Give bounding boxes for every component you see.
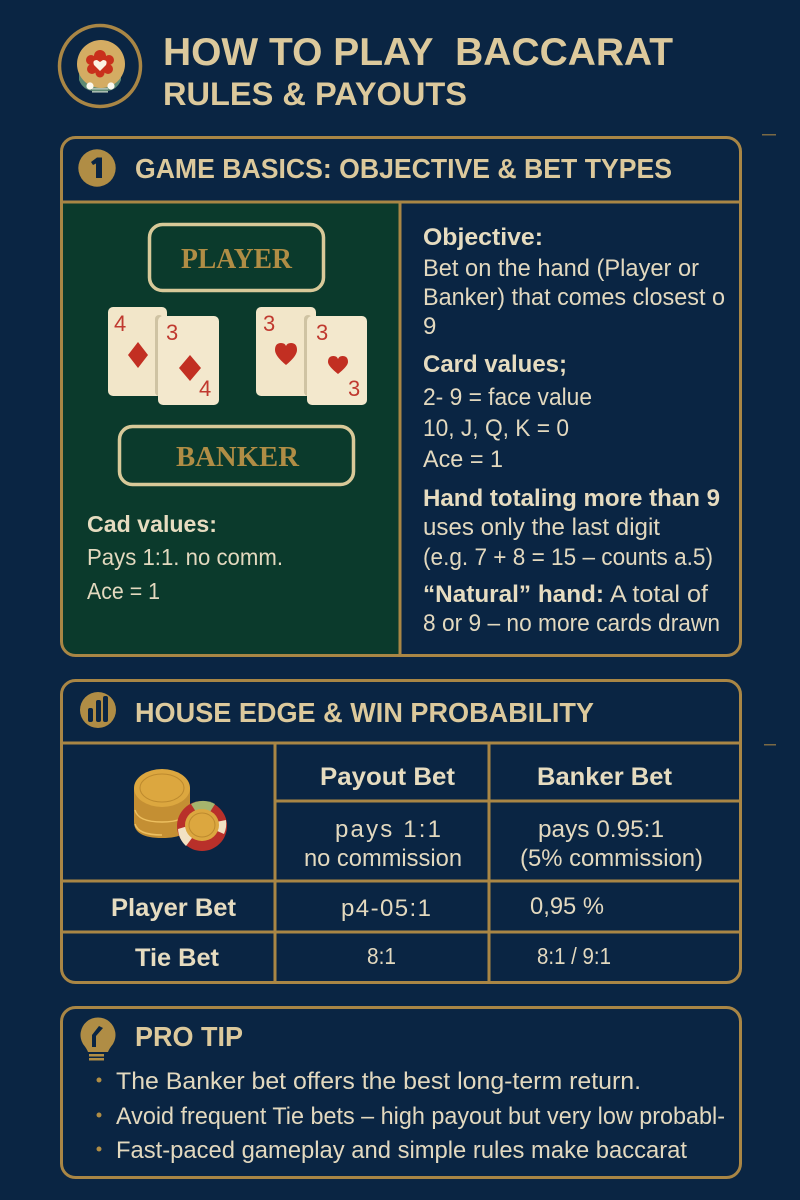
text: hand totals: uses only the last digit bbox=[423, 514, 660, 541]
icon: coins and chip bbox=[134, 769, 227, 851]
playing cards: hearts: 3 bbox=[348, 376, 360, 401]
tip list: Avoid frequent Tie bets – high payout but very low probabl- bbox=[116, 1103, 725, 1130]
text: card values: 10, J, Q, K = 0 bbox=[423, 415, 569, 442]
player label box: PLAYER bbox=[181, 244, 293, 275]
text: natural hand: 8 or 9 – no more cards drawn bbox=[423, 610, 720, 637]
playing cards: diamonds: 4 bbox=[199, 376, 211, 401]
banker label box bbox=[120, 426, 354, 484]
text: natural hand: “Natural” hand: bbox=[423, 581, 604, 608]
text: left card values: Pays 1:1. no comm. bbox=[87, 544, 283, 570]
title: RULES & PAYOUTS bbox=[163, 76, 467, 112]
text: objective: Bet on the hand (Player or bbox=[423, 255, 699, 282]
text: card values: Card values; bbox=[423, 351, 567, 378]
text: objective bbox=[423, 224, 725, 340]
playing cards: diamonds: 4 bbox=[114, 311, 126, 336]
text: left card values: Cad values: bbox=[87, 511, 217, 537]
cell: banker terms bbox=[520, 816, 703, 872]
cell: payout terms: pays 1:1 bbox=[335, 816, 441, 843]
panel: house edge bbox=[61, 680, 741, 983]
tip list: Fast-paced gameplay and simple rules make baccarat bbox=[116, 1137, 687, 1164]
cell: banker terms: (5% commission) bbox=[520, 845, 703, 872]
player label box bbox=[150, 224, 324, 290]
text: card values bbox=[423, 351, 592, 473]
playing cards: hearts: 3 bbox=[263, 311, 275, 336]
panel: game basics bbox=[61, 138, 741, 656]
table header: banker bet: Banker Bet bbox=[537, 763, 673, 791]
table header: payout bet: Payout Bet bbox=[320, 763, 456, 791]
icon: bar chart badge bbox=[80, 692, 116, 728]
cell: banker terms: pays 0.95:1 bbox=[538, 816, 664, 843]
section heading: GAME BASICS: OBJECTIVE & BET TYPES bbox=[135, 153, 672, 184]
cell: player payout: p4-05:1 bbox=[341, 895, 431, 922]
text: card values: 2- 9 = face value bbox=[423, 384, 592, 411]
title bbox=[163, 31, 673, 112]
text: card values: Ace = 1 bbox=[423, 446, 503, 473]
text: left card values bbox=[87, 511, 283, 604]
section heading: HOUSE EDGE & WIN PROBABILITY bbox=[135, 697, 594, 728]
icon: number one badge bbox=[78, 149, 116, 187]
tip list bbox=[96, 1068, 725, 1164]
text: hand totals: Hand totaling more than 9 bbox=[423, 485, 720, 512]
panel: pro tip bbox=[62, 1008, 740, 1178]
text: left card values: Ace = 1 bbox=[87, 578, 160, 604]
row label: tie bet: Tie Bet bbox=[135, 944, 220, 972]
playing cards: hearts bbox=[256, 307, 367, 405]
tip list: The Banker bet offers the best long-term return. bbox=[116, 1068, 641, 1095]
icon: light bulb bbox=[80, 1017, 116, 1060]
playing cards: hearts: 3 bbox=[316, 320, 328, 345]
playing cards: diamonds bbox=[108, 307, 219, 405]
cell: tie payout: 8:1 bbox=[367, 943, 396, 969]
banker label box: BANKER bbox=[176, 442, 300, 473]
cell: payout terms: no commission bbox=[304, 845, 462, 872]
row label: player bet: Player Bet bbox=[111, 894, 237, 922]
text: hand totals: (e.g. 7 + 8 = 15 – counts a.5) bbox=[423, 544, 713, 571]
title: HOW TO PLAY BACCARAT bbox=[163, 31, 673, 74]
cell: tie banker payout: 8:1 / 9:1 bbox=[537, 943, 611, 969]
text: objective: Objective: bbox=[423, 224, 543, 251]
text: objective: Banker) that comes closest o bbox=[423, 284, 725, 311]
text: natural hand bbox=[423, 581, 720, 637]
text: objective: 9 bbox=[423, 313, 436, 340]
icon: baccarat emblem bbox=[60, 26, 140, 106]
green table area bbox=[62, 203, 400, 655]
playing cards: diamonds: 3 bbox=[166, 320, 178, 345]
text: natural hand: A total of bbox=[610, 581, 708, 608]
section heading: PRO TIP bbox=[135, 1021, 243, 1052]
text: hand totals bbox=[423, 485, 720, 571]
cell: player banker value: 0,95 % bbox=[530, 893, 604, 920]
cell: payout terms bbox=[304, 816, 462, 872]
